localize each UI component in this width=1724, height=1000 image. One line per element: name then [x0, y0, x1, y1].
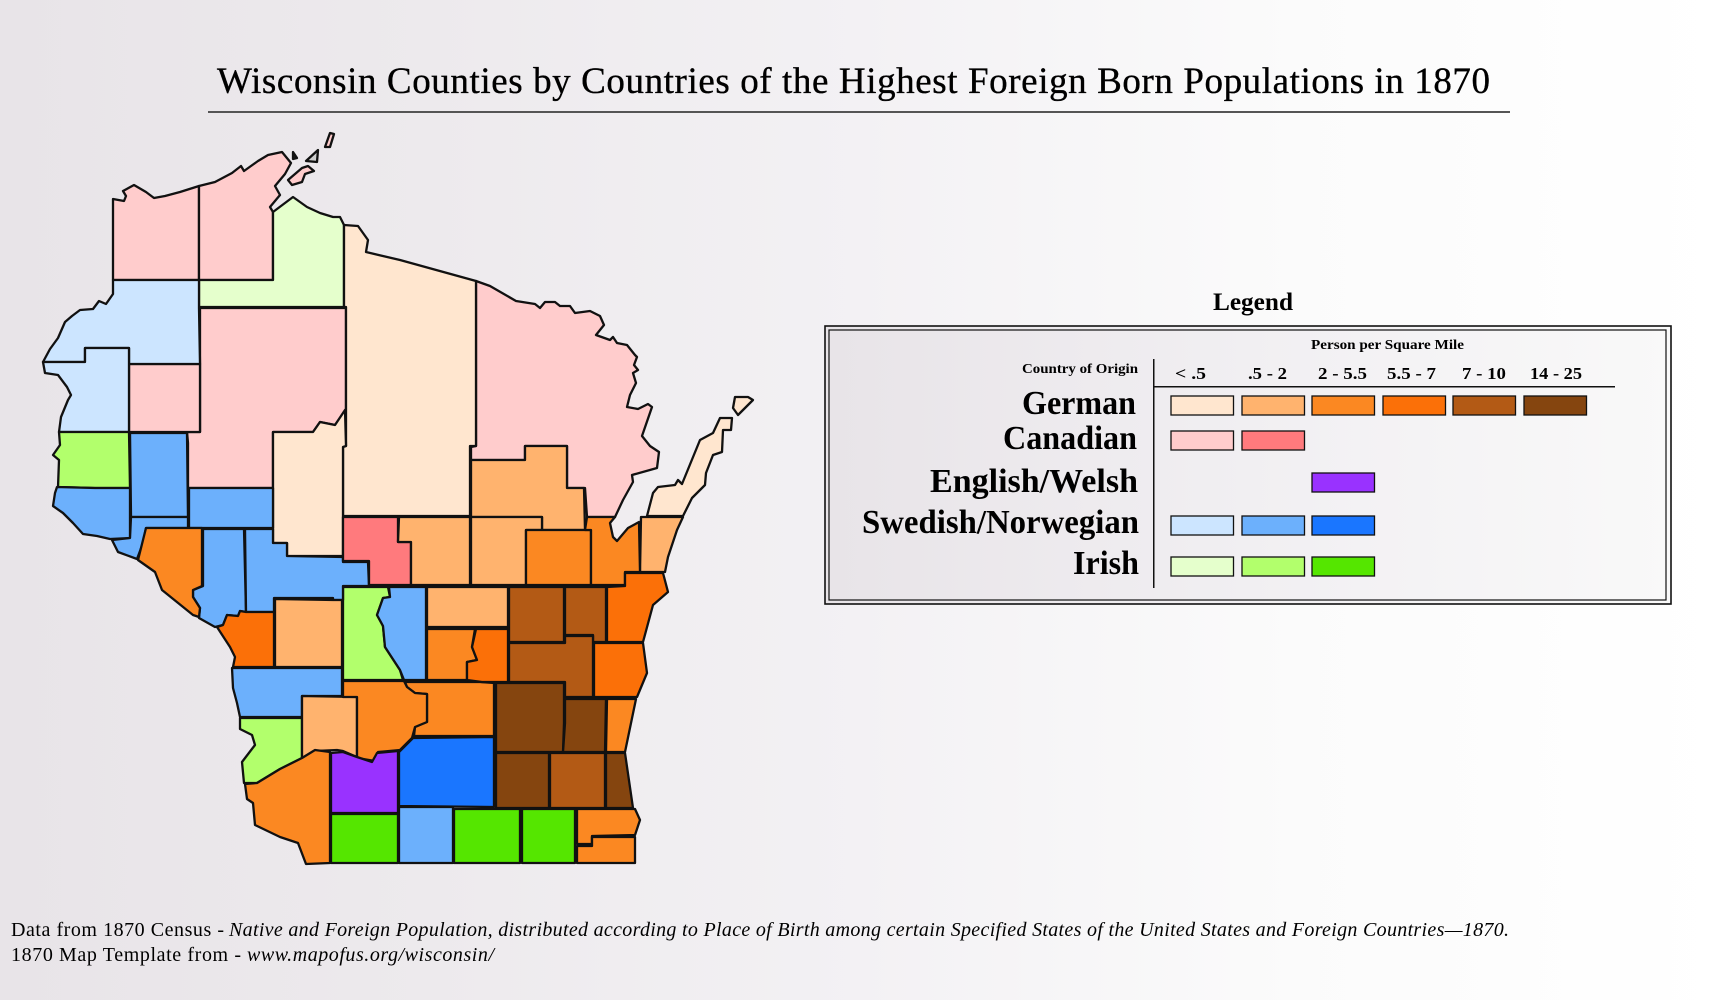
source notes: Native and Foreign Population, distributed according to Place of Birth among certain Specified States of the United States and Foreign Countries—1870.	[228, 919, 1509, 941]
county group: Irish mid density	[53, 432, 403, 783]
map: Wisconsin counties	[43, 133, 753, 864]
source notes: Data from 1870 Census -	[11, 919, 224, 941]
legend row labels: Irish	[1073, 545, 1139, 582]
county group: Irish low density	[199, 197, 344, 307]
county group: German low density	[273, 225, 753, 556]
county group: Swedish/Norwegian low density	[43, 280, 200, 432]
county group: German mid-high density	[217, 573, 668, 697]
county group: German mid density	[138, 517, 640, 864]
legend row labels: Swedish/Norwegian	[862, 504, 1139, 541]
legend row labels	[862, 385, 1139, 582]
county group: German mid-low density	[275, 446, 683, 758]
legend column labels: 5.5 - 7	[1387, 364, 1437, 383]
legend column labels	[1175, 364, 1582, 383]
legend axis heading: density: Person per Square Mile	[1311, 338, 1464, 353]
county group: Canadian low density	[113, 152, 659, 517]
legend row labels: German	[1022, 385, 1136, 422]
legend column labels: 14 - 25	[1530, 364, 1582, 383]
county: Swedish/Norwegian high density	[399, 737, 494, 807]
legend row labels: English/Welsh	[930, 463, 1138, 500]
source notes	[11, 919, 1509, 966]
county group: islands	[293, 133, 334, 162]
source notes: www.mapofus.org/wisconsin/	[247, 944, 496, 966]
county group: Swedish/Norwegian mid density	[53, 433, 453, 863]
county group: German highest density	[496, 683, 633, 808]
legend column labels: 2 - 5.5	[1318, 364, 1367, 383]
county: English/Welsh	[331, 751, 398, 813]
legend column labels: 7 - 10	[1462, 364, 1506, 383]
legend column labels: < .5	[1175, 364, 1206, 383]
county group: Irish high density	[331, 809, 575, 863]
legend row labels: Canadian	[1003, 420, 1137, 457]
legend column labels: .5 - 2	[1248, 364, 1287, 383]
legend swatches	[1171, 396, 1586, 576]
source notes: 1870 Map Template from -	[11, 944, 241, 966]
legend axis heading: origin: Country of Origin	[1022, 362, 1138, 377]
legend title: Legend	[1213, 289, 1293, 316]
county group: Canadian high density	[343, 517, 411, 585]
title: Wisconsin Counties by Countries of the Highest Foreign Born Populations in 1870	[217, 61, 1490, 102]
county group: German high density	[509, 587, 606, 808]
panel: legend	[825, 326, 1671, 604]
